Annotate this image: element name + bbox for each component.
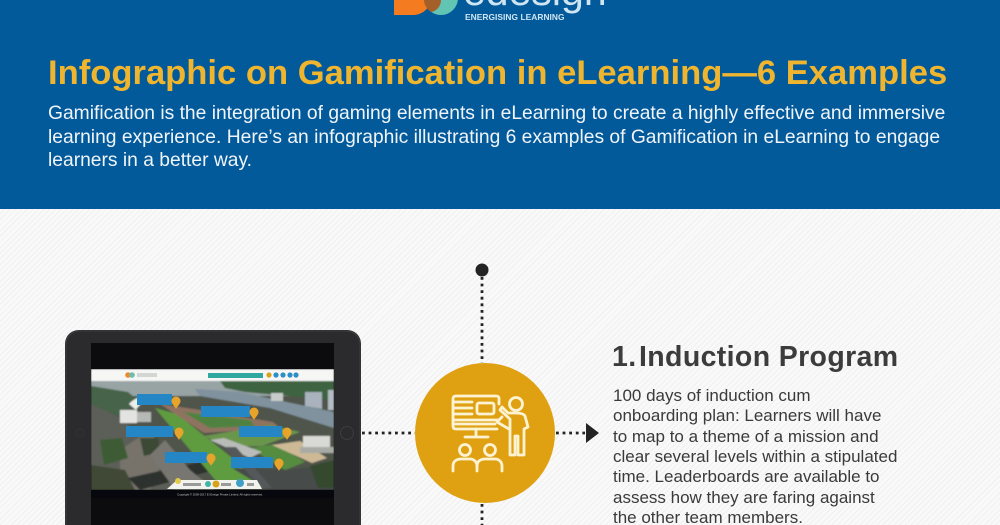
section description — [613, 386, 897, 525]
intro text: Gamification is the integration of gaming elements in eLearning to create a highly effective and immersive — [48, 103, 945, 124]
logo — [394, 0, 607, 22]
gold circle icon badge — [415, 363, 555, 503]
title: Infographic on Gamification in eLearning—6 Examples — [48, 54, 947, 92]
section description: assess how they are faring against — [613, 488, 875, 507]
section heading: Induction Program — [639, 341, 898, 373]
section heading: 1. — [612, 341, 636, 373]
arrow head — [586, 423, 599, 443]
screen footer — [91, 490, 334, 498]
intro text — [48, 103, 945, 171]
top node dot — [476, 264, 488, 276]
course map level labels — [126, 394, 282, 468]
intro text: learning experience. Here’s an infographic illustrating 6 examples of Gamification in eLearning to engage — [48, 126, 940, 148]
section description: time. Leaderboards are available to — [613, 467, 880, 486]
header band — [0, 0, 1000, 209]
tablet with course map screenshot — [65, 330, 361, 525]
section description: 100 days of induction cum — [613, 386, 811, 405]
icon: presenter with audience — [453, 396, 528, 471]
section description: to map to a theme of a mission and — [613, 427, 879, 446]
course page top bar — [125, 372, 299, 378]
course map level pins — [172, 396, 292, 471]
logo: ENERGISING LEARNING — [465, 12, 565, 22]
intro text: learners in a better way. — [48, 150, 252, 171]
section description: onboarding plan: Learners will have — [613, 406, 881, 425]
screen photo — [91, 369, 334, 490]
tablet with course map screenshot: Copyright © 2009-2017 EI Design Private Limited. All rights reserved. — [177, 492, 263, 496]
course map legend strip — [167, 478, 262, 489]
section description: clear several levels within a stipulated — [613, 447, 897, 466]
